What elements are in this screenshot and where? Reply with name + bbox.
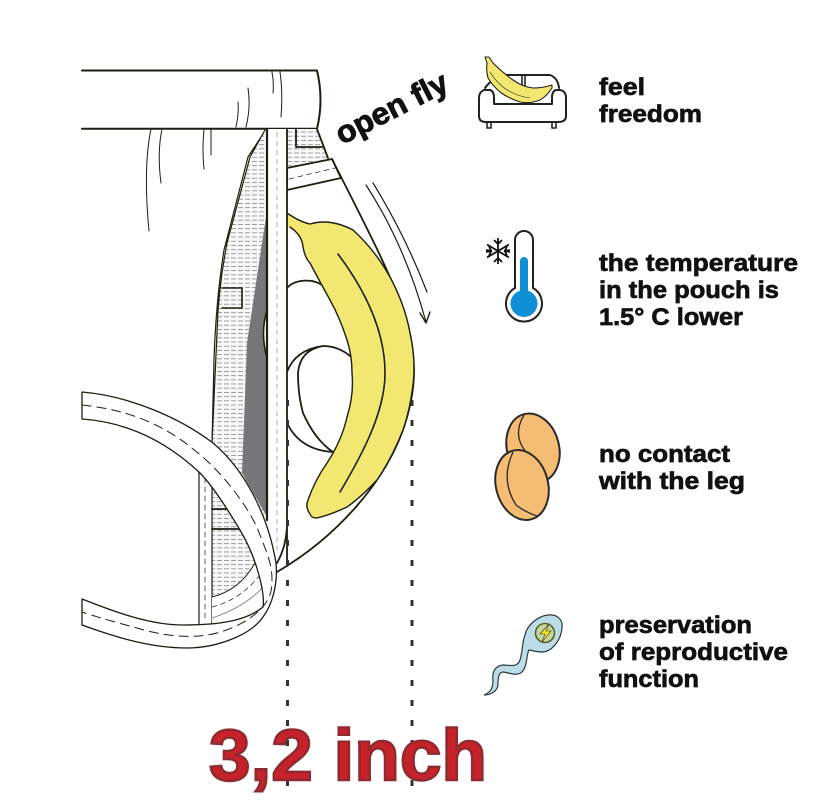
- icon: testicles: [488, 407, 567, 526]
- text: preservation: of reproductive: [599, 639, 788, 666]
- top mesh with pocket: [287, 129, 328, 168]
- text: no contact: with the leg: [598, 468, 745, 495]
- text: no contact: [598, 441, 745, 495]
- fabric folds: [146, 129, 211, 231]
- text: preservation: [599, 612, 788, 693]
- text: temperature: the temperature: [599, 250, 798, 277]
- text: feel freedom: [599, 74, 702, 128]
- dotted measure line right: [410, 400, 414, 790]
- text: temperature: 1.5° C lower: [599, 304, 743, 331]
- icon: sperm with bolt: [484, 615, 562, 695]
- left mesh panel: [212, 130, 267, 597]
- text: preservation: function: [599, 666, 699, 693]
- fly band: [287, 159, 341, 190]
- testicle front: [287, 346, 350, 452]
- icon: thermometer and snowflake: [486, 231, 542, 322]
- icon: banana on sofa: [479, 57, 566, 128]
- dark inner panel: [242, 210, 267, 517]
- text: feel freedom: freedom: [599, 101, 702, 128]
- small mesh patch: [222, 288, 242, 308]
- measurement: 3,2 inch: 3,2 inch: [209, 716, 487, 796]
- label: open fly: open fly: [329, 64, 455, 151]
- text: temperature: in the pouch is: [599, 277, 779, 304]
- left vertical strip: [199, 443, 242, 624]
- centre placket: [267, 129, 287, 566]
- dotted measure line left: [286, 400, 289, 790]
- mesh edge lines: [212, 130, 265, 443]
- text: preservation: preservation: [599, 612, 752, 639]
- text: feel freedom: feel: [599, 74, 645, 101]
- testicle behind: [287, 281, 330, 292]
- lower band: [212, 563, 268, 623]
- pouch outline: [277, 159, 414, 572]
- egg through gap: [264, 310, 267, 358]
- leg band: [82, 392, 276, 648]
- banana: [287, 213, 414, 518]
- motion arrow: [366, 183, 430, 323]
- waistband: [82, 70, 320, 129]
- diagram: underwear with pouch: [82, 70, 430, 648]
- text: temperature: [599, 250, 798, 331]
- snowflake: [486, 238, 510, 264]
- text: no contact: no contact: [599, 441, 730, 468]
